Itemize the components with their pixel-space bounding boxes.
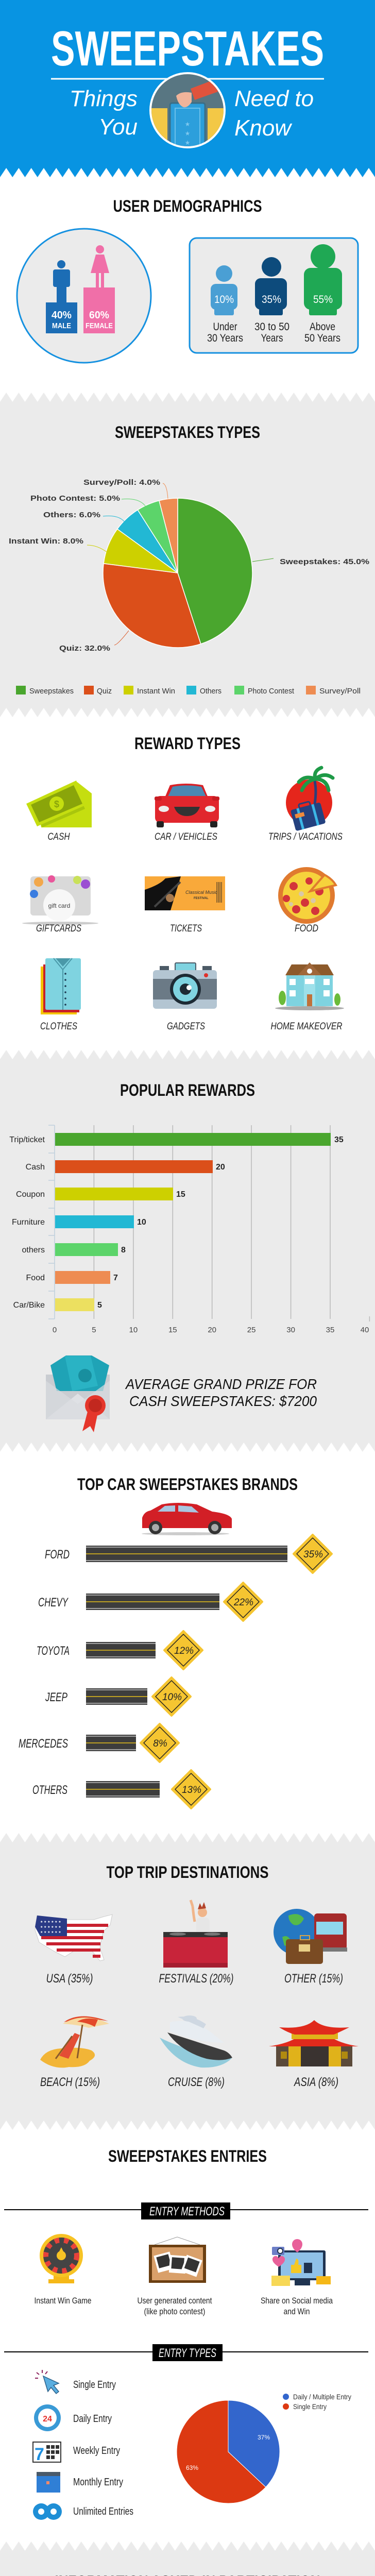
bar chart: popular rewards: Car/Bike xyxy=(13,1301,45,1310)
bar chart: popular rewards: 10 xyxy=(129,1326,138,1334)
signs: percentages: 35% xyxy=(303,1549,323,1560)
subtitle: You xyxy=(98,114,138,140)
labels row 2 destinations xyxy=(40,2075,338,2089)
heading: popular rewards: POPULAR REWARDS xyxy=(120,1081,255,1099)
bar chart: popular rewards: 5 xyxy=(97,1301,102,1310)
bar chart: popular rewards: 35 xyxy=(326,1326,334,1334)
age labels: Above xyxy=(310,321,335,333)
age labels: Under xyxy=(213,321,237,333)
labels row 2 xyxy=(36,923,318,934)
pie labels: Others: 6.0% xyxy=(43,511,100,519)
icon: usa flag map: ★ ★ ★ ★ ★ ★ xyxy=(40,1930,61,1934)
signs: percentages: 12% xyxy=(174,1646,194,1656)
heading: reward types: REWARD TYPES xyxy=(134,734,241,753)
age labels xyxy=(207,321,340,344)
signs: percentages: 22% xyxy=(233,1597,253,1608)
labels row 3: HOME MAKEOVER xyxy=(271,1021,343,1032)
heading: top trip destinations: TOP TRIP DESTINATIONS xyxy=(106,1863,269,1882)
labels: car brands: TOYOTA xyxy=(37,1644,70,1658)
icon: prize wheel xyxy=(40,2234,83,2283)
icon: unlimited xyxy=(33,2503,62,2520)
labels: entry methods: and Win xyxy=(283,2307,310,2316)
icon: ticket: FESTIVAL xyxy=(194,897,209,900)
icon: camera xyxy=(153,963,217,1009)
icon: house xyxy=(275,962,344,1010)
labels: entry methods: (like photo contest) xyxy=(144,2307,205,2316)
icon: 24 hours: 24 xyxy=(43,2415,52,2424)
bar chart: popular rewards: 15 xyxy=(168,1326,177,1334)
male bar xyxy=(46,302,77,333)
subtitle: Need to xyxy=(234,86,314,111)
heading: top car brands: TOP CAR SWEEPSTAKES BRANDS xyxy=(77,1475,298,1494)
icon: ticket: Classical Music xyxy=(185,890,218,895)
labels row 2: FOOD xyxy=(295,923,318,934)
labels row 2 destinations: CRUISE (8%) xyxy=(168,2075,225,2089)
bar chart: popular rewards: Food xyxy=(26,1274,45,1282)
heading: sweepstakes types: SWEEPSTAKES TYPES xyxy=(115,423,260,442)
chart: car brands roads xyxy=(86,1546,287,1798)
legend: entry types xyxy=(283,2393,351,2411)
list: entry types xyxy=(33,2370,133,2520)
labels: car brands: MERCEDES xyxy=(19,1737,68,1751)
bar chart: popular rewards: 7 xyxy=(113,1274,118,1282)
labels: car brands xyxy=(19,1548,70,1797)
signs: percentages: 10% xyxy=(162,1692,182,1703)
icon: beach xyxy=(40,2016,109,2067)
labels row 1: CAR / VEHICLES xyxy=(155,832,217,842)
labels row 3: CLOTHES xyxy=(40,1021,77,1032)
panel: gender xyxy=(17,229,151,363)
icon: gift card: gift card xyxy=(48,902,70,909)
list: entry types: Weekly Entry xyxy=(73,2445,120,2456)
icon: hand with ticket: ★ xyxy=(185,130,190,137)
labels row 2 destinations: ASIA (8%) xyxy=(293,2075,338,2089)
icon: hand with ticket xyxy=(149,73,226,152)
icon: monthly calendar xyxy=(37,2472,60,2493)
heading: user demographics: USER DEMOGRAPHICS xyxy=(113,197,262,215)
icon: hand with ticket: ★ xyxy=(185,121,190,128)
bar chart: popular rewards: others xyxy=(22,1246,45,1255)
bar chart: popular rewards: 0 xyxy=(53,1326,57,1334)
subtitle xyxy=(70,86,314,141)
icon: 24 hours xyxy=(34,2404,61,2431)
bar chart: popular rewards: 20 xyxy=(216,1163,225,1172)
bar chart: popular rewards: 10 xyxy=(137,1218,146,1227)
icon: cash xyxy=(26,781,92,827)
age labels: 50 Years xyxy=(304,332,340,344)
pie chart: entry types: 63% xyxy=(186,2464,198,2471)
icon: hand with ticket: ★ xyxy=(185,139,190,146)
subheading: entry methods xyxy=(4,2202,368,2219)
labels row 2 destinations: BEACH (15%) xyxy=(40,2075,100,2089)
figure: above 50: 55% xyxy=(313,294,333,306)
pie labels: Instant Win: 8.0% xyxy=(9,537,83,546)
labels: entry methods: Instant Win Game xyxy=(34,2296,92,2306)
bar chart: popular rewards: 30 xyxy=(286,1326,295,1334)
age labels: Years xyxy=(261,332,283,344)
pie chart: entry types xyxy=(177,2400,280,2503)
icon: weekly calendar xyxy=(33,2442,61,2464)
labels row 2: TICKETS xyxy=(170,923,202,934)
labels row 1 destinations: USA (35%) xyxy=(46,1972,93,1986)
legend: entry types: Daily / Multiple Entry xyxy=(293,2393,351,2401)
icon: usa flag map: ★ ★ ★ ★ ★ ★ xyxy=(40,1920,61,1924)
icon: globe bus suitcase xyxy=(274,1909,347,1964)
icon: clothes xyxy=(41,958,81,1014)
icon: weekly calendar: 7 xyxy=(35,2445,44,2464)
labels row 1 xyxy=(47,832,343,842)
pie chart: entry types: 37% xyxy=(258,2434,270,2441)
pie labels: Sweepstakes: 45.0% xyxy=(280,557,369,566)
icon: pizza xyxy=(278,867,336,924)
labels: entry methods xyxy=(34,2296,333,2316)
legend: sweepstakes types: Others xyxy=(200,687,221,696)
figure: under 30 xyxy=(211,265,237,315)
bar chart: popular rewards: Cash xyxy=(26,1163,45,1172)
list: entry types: Daily Entry xyxy=(73,2413,112,2425)
age labels: 30 Years xyxy=(207,332,243,344)
signs: percentages: 8% xyxy=(153,1738,167,1749)
icon: red car side xyxy=(142,1503,232,1535)
age labels: 30 to 50 xyxy=(254,321,289,333)
icon: cash: $ xyxy=(54,799,59,809)
pie labels: Survey/Poll: 4.0% xyxy=(83,478,160,487)
labels row 2: GIFTCARDS xyxy=(36,923,81,934)
bar chart: popular rewards: 25 xyxy=(247,1326,255,1334)
legend: sweepstakes types: Sweepstakes xyxy=(29,687,74,696)
list: entry types: Single Entry xyxy=(73,2379,116,2391)
bar chart: popular rewards: 35 xyxy=(334,1136,344,1144)
female bar: FEMALE xyxy=(86,321,113,330)
labels: car brands: JEEP xyxy=(45,1690,67,1704)
labels row 1: TRIPS / VACATIONS xyxy=(268,832,343,842)
header xyxy=(51,31,324,148)
icon: cruise ship xyxy=(160,2015,232,2067)
pie labels: Photo Contest: 5.0% xyxy=(30,494,120,503)
legend: sweepstakes types: Photo Contest xyxy=(248,687,295,696)
subheading: entry types xyxy=(4,2344,368,2361)
labels: car brands: OTHERS xyxy=(32,1783,67,1797)
signs: percentages xyxy=(141,1535,332,1808)
subtitle: Know xyxy=(234,115,293,141)
icon: trips xyxy=(286,768,333,831)
male bar: MALE xyxy=(52,321,71,330)
bar chart: popular rewards xyxy=(9,1125,369,1334)
callout: average grand prize: CASH SWEEPSTAKES: $7200 xyxy=(129,1393,317,1409)
icon: cursor xyxy=(35,2370,59,2394)
bar chart: popular rewards: Trip/ticket xyxy=(9,1136,45,1144)
figure: 30 to 50 xyxy=(255,257,287,315)
subheading: entry methods: ENTRY METHODS xyxy=(149,2205,225,2218)
labels row 1 destinations: FESTIVALS (20%) xyxy=(159,1972,234,1986)
icon: asia pagoda xyxy=(269,2020,359,2066)
bar chart: popular rewards: Furniture xyxy=(12,1218,45,1227)
labels row 1 destinations: OTHER (15%) xyxy=(284,1972,343,1986)
icon: envelope with cash xyxy=(46,1355,110,1432)
labels row 1 destinations xyxy=(46,1972,343,1986)
female bar: 60% xyxy=(89,310,109,321)
icon: photo board xyxy=(149,2237,206,2283)
callout: average grand prize: AVERAGE GRAND PRIZE FOR xyxy=(125,1376,317,1392)
icon: usa flag map: ★ ★ ★ ★ ★ ★ xyxy=(40,1925,61,1929)
figure: above 50 xyxy=(304,244,342,315)
bar chart: popular rewards: Coupon xyxy=(16,1190,45,1199)
labels row 3 xyxy=(40,1021,343,1032)
female bar xyxy=(83,287,115,333)
labels: car brands: CHEVY xyxy=(38,1596,69,1609)
bar chart: popular rewards: 40 xyxy=(361,1326,369,1334)
pie labels xyxy=(9,478,369,653)
labels: entry methods: Share on Social media xyxy=(261,2296,333,2306)
heading: sweepstakes entries: SWEEPSTAKES ENTRIES xyxy=(108,2147,267,2165)
labels: car brands: FORD xyxy=(45,1548,70,1562)
legend: sweepstakes types: Quiz xyxy=(97,687,112,696)
labels row 3: GADGETS xyxy=(167,1021,205,1032)
icon: social media monitor xyxy=(271,2239,331,2286)
pie labels: Quiz: 32.0% xyxy=(59,644,110,653)
icon: male xyxy=(53,260,70,303)
legend: sweepstakes types: Survey/Poll xyxy=(319,687,361,696)
icon: car front xyxy=(155,784,219,827)
subtitle: Things xyxy=(70,86,138,111)
icon: dj festival xyxy=(163,1900,228,1968)
legend: entry types: Single Entry xyxy=(293,2402,327,2411)
icon: usa flag map xyxy=(35,1914,112,1961)
panel: age groups xyxy=(190,238,358,353)
labels: entry methods: User generated content xyxy=(137,2296,212,2306)
icon: ticket xyxy=(145,876,225,910)
list: entry types: Monthly Entry xyxy=(73,2477,123,2488)
signs: percentages: 13% xyxy=(182,1785,201,1795)
bar chart: popular rewards: 15 xyxy=(176,1190,185,1199)
icon: female xyxy=(91,245,109,287)
labels row 1: CASH xyxy=(47,832,70,842)
subheading: entry types: ENTRY TYPES xyxy=(159,2346,216,2360)
legend: sweepstakes types: Instant Win xyxy=(137,687,175,696)
bar chart: popular rewards: 5 xyxy=(92,1326,96,1334)
list: entry types: Unlimited Entries xyxy=(73,2506,133,2517)
icon: gift card xyxy=(22,875,98,925)
bar chart: popular rewards: 20 xyxy=(208,1326,216,1334)
figure: under 30: 10% xyxy=(214,294,234,306)
pie chart: sweepstakes types xyxy=(103,498,252,648)
bar chart: popular rewards: 8 xyxy=(121,1246,126,1255)
callout: average grand prize xyxy=(125,1376,317,1409)
male bar: 40% xyxy=(52,310,72,321)
figure: 30 to 50: 35% xyxy=(262,294,281,306)
legend: sweepstakes types xyxy=(16,686,361,696)
